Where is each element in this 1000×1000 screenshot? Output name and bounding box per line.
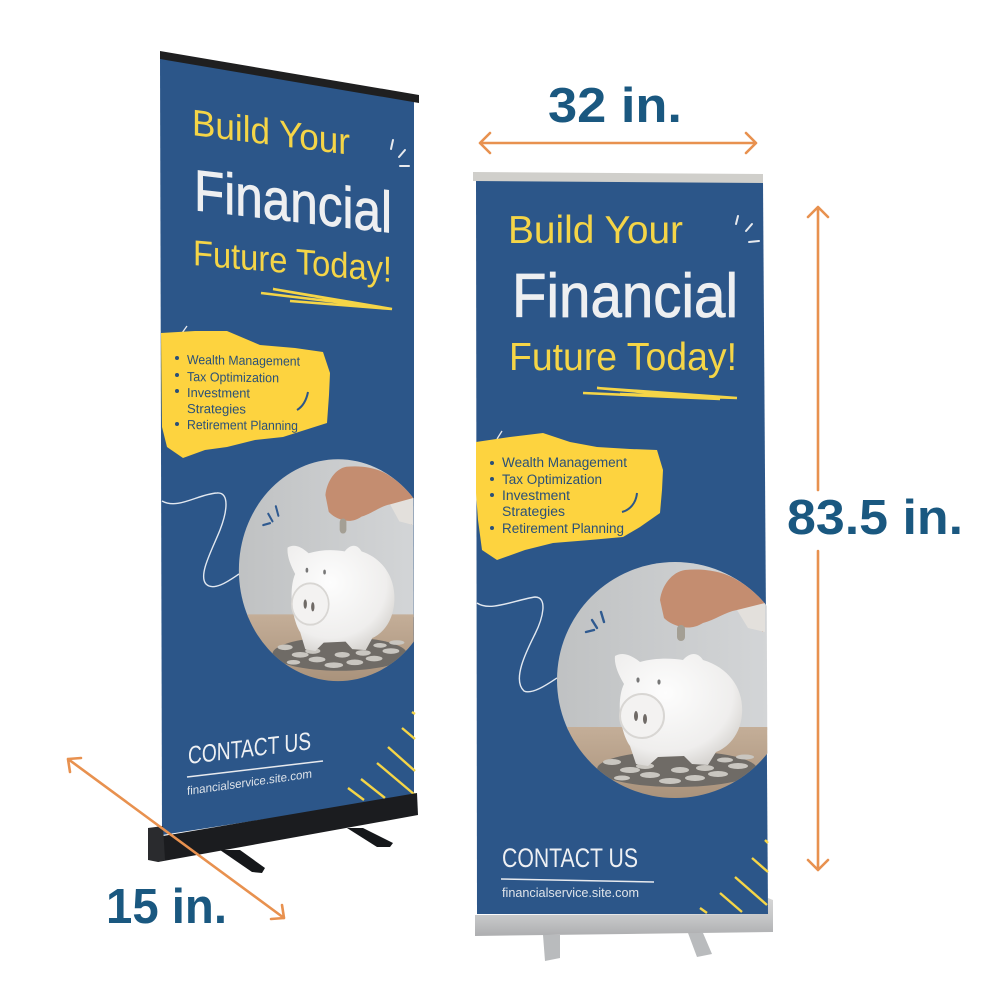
top rail	[473, 172, 763, 183]
panel: black banner (angled view)	[148, 51, 443, 873]
photo: piggy bank	[238, 459, 414, 682]
dimension: 15 in: 15 in.	[106, 880, 227, 934]
contact us: CONTACT US	[502, 843, 638, 873]
heading: Financial: Financial	[512, 262, 738, 331]
heading: Build Your: Build Your	[508, 209, 683, 252]
yellow brush panel	[476, 431, 663, 560]
service list: Tax Optimization	[502, 472, 602, 487]
service list	[490, 455, 627, 536]
service list: Retirement Planning	[187, 417, 298, 433]
yellow diagonal accents	[700, 840, 768, 913]
website: financialservice.site.com	[502, 886, 639, 900]
service list: Investment	[502, 488, 570, 503]
squiggle line	[477, 597, 557, 692]
service list: Investment	[187, 385, 250, 401]
service list: Wealth Management	[187, 352, 300, 369]
sparkle marks	[391, 140, 409, 166]
panel: silver banner (front view)	[473, 172, 800, 961]
heading: Build Your: Build Your	[192, 101, 350, 163]
contact us: CONTACT US	[188, 727, 311, 770]
top rail	[160, 51, 419, 103]
dimension: 32 in: 32 in.	[548, 79, 682, 133]
service list: Retirement Planning	[502, 521, 624, 536]
website: financialservice.site.com	[187, 767, 312, 798]
blue banner graphic	[160, 57, 414, 835]
service list: Strategies	[502, 504, 565, 519]
arrow: height 83.5 in	[808, 207, 828, 870]
yellow brush panel	[161, 326, 330, 458]
blue banner graphic	[476, 180, 768, 914]
service list	[175, 352, 300, 433]
heading: Future Today: Future Today!	[509, 336, 737, 379]
contact divider	[501, 879, 654, 882]
dimension: 83.5 in: 83.5 in.	[787, 491, 963, 545]
base cassette	[148, 793, 418, 862]
service list: Tax Optimization	[187, 369, 279, 385]
photo: piggy bank	[557, 562, 768, 798]
sparkle marks	[736, 216, 759, 242]
heading: Financial: Financial	[194, 158, 392, 246]
arrow: depth 15 in	[68, 758, 284, 919]
banner feet black	[220, 828, 393, 873]
service list: Strategies	[187, 401, 246, 417]
yellow underline scribble	[583, 388, 737, 399]
banner feet silver	[543, 933, 712, 961]
yellow diagonal accents	[348, 712, 415, 800]
yellow underline scribble	[261, 289, 392, 309]
base cassette	[475, 898, 773, 936]
squiggle line	[162, 493, 239, 587]
service list: Wealth Management	[502, 455, 627, 470]
arrow: width 32 in	[480, 133, 756, 153]
heading: Future Today: Future Today!	[193, 232, 392, 290]
contact divider	[187, 761, 323, 777]
